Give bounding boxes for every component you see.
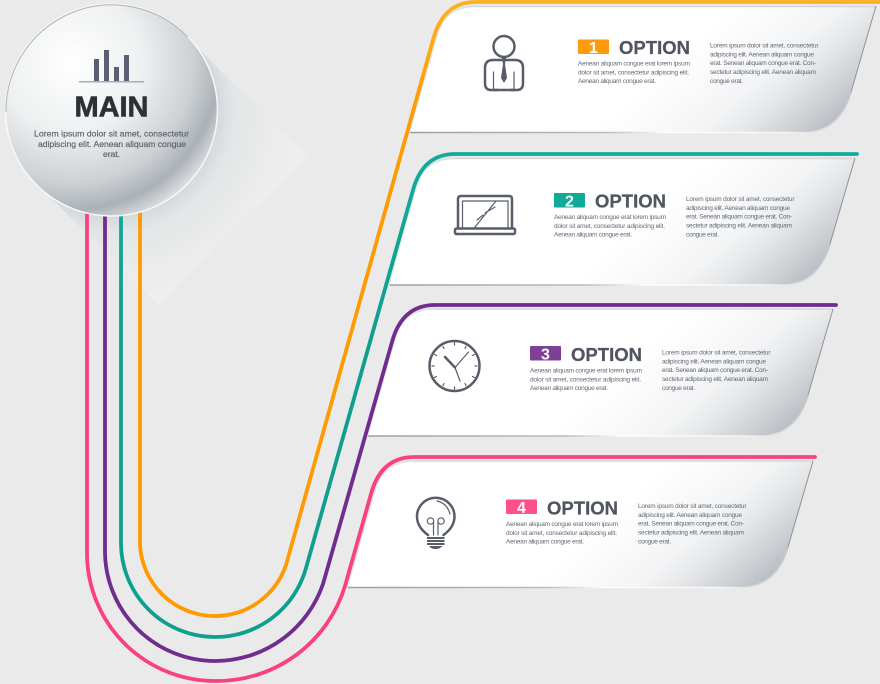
icon: bar chart xyxy=(79,50,144,82)
text: option 1 left column: Aenean aliquam congue erat. xyxy=(578,78,656,85)
text: option 2 right column: adipiscing elit. Aenean aliquam congue xyxy=(686,205,790,212)
icon: light bulb xyxy=(417,498,454,549)
panel 1 shape xyxy=(410,7,876,133)
text: option 3 right column: sectetur adipiscing elit. Aenean aliquam xyxy=(662,376,768,383)
text: option 3 left column: Aenean aliquam congue erat. xyxy=(530,385,608,392)
connector line: teal xyxy=(121,154,857,637)
heading: option 2: OPTION xyxy=(595,190,666,212)
text: option 3 left column xyxy=(530,368,642,392)
icon: businessman xyxy=(485,36,523,90)
text: option 2 left column xyxy=(554,214,666,239)
text: option 2 left column: Aenean aliquam congue erat lorem ipsum xyxy=(554,214,666,221)
text: option 2 left column: Aenean aliquam congue erat. xyxy=(554,232,632,239)
badge 3: 3 xyxy=(541,346,550,363)
heading: option 4: OPTION xyxy=(547,498,618,518)
icon: laptop xyxy=(455,196,515,234)
icon: clock xyxy=(430,341,480,391)
badge 4 xyxy=(506,500,537,517)
heading: option 3: OPTION xyxy=(571,344,642,365)
text: option 1 left column: Aenean aliquam congue erat lorem ipsum xyxy=(578,60,690,68)
text: main description: erat. xyxy=(103,149,120,159)
text: option 2 left column: dolor sit amet, consectetur adipiscing elit. xyxy=(554,223,665,230)
text: option 1 right column xyxy=(710,42,819,85)
text: option 1 right column: sectetur adipiscing elit. Aenean aliquam xyxy=(710,69,816,76)
text: option 4 left column: Aenean aliquam congue erat. xyxy=(506,539,584,546)
circle disc xyxy=(6,4,218,216)
panel: option 4 xyxy=(347,460,813,588)
panel: option 3 xyxy=(367,308,833,436)
panel: option 2 xyxy=(388,158,855,285)
text: option 2 right column: sectetur adipiscing elit. Aenean aliquam xyxy=(686,222,792,230)
badge 1 xyxy=(578,40,609,57)
text: option 4 right column: Lorem ipsum dolor sit amet, consectetur xyxy=(638,503,747,510)
heading: option 1: OPTION xyxy=(619,37,690,58)
text: option 3 right column: congue erat. xyxy=(662,385,695,392)
text: option 1 right column: adipiscing elit. Aenean aliquam congue xyxy=(710,52,814,58)
text: option 3 right column: adipiscing elit. Aenean aliquam congue xyxy=(662,358,766,366)
text: option 4 left column xyxy=(506,521,618,546)
panel 3 shape xyxy=(368,309,833,436)
text: option 3 left column: dolor sit amet, consectetur adipiscing elit. xyxy=(530,376,641,384)
text: option 3 right column xyxy=(662,350,771,392)
connector line: pink xyxy=(87,205,815,681)
text: option 1 left column xyxy=(578,60,690,85)
connector line: purple xyxy=(105,205,836,661)
text: main description: adipiscing elit. Aenean aliquam congue xyxy=(38,139,186,149)
text: option 4 left column: dolor sit amet, consectetur adipiscing elit. xyxy=(506,530,617,537)
text: option 4 right column: sectetur adipiscing elit. Aenean aliquam xyxy=(638,530,744,536)
text: option 1 right column: erat. Senean aliquam congue erat. Con- xyxy=(710,60,816,67)
text: option 4 right column: congue erat. xyxy=(638,538,671,546)
long shadow of main circle xyxy=(45,45,308,305)
badge 3 xyxy=(530,346,561,363)
badge 2: 2 xyxy=(565,193,574,210)
panel 4 shape xyxy=(348,461,813,588)
text: main description xyxy=(34,128,189,159)
text: option 4 right column xyxy=(638,503,747,546)
panel: option 1 xyxy=(409,6,876,133)
text: option 4 right column: erat. Senean aliquam congue erat. Con- xyxy=(638,521,744,528)
text: option 4 left column: Aenean aliquam congue erat lorem ipsum xyxy=(506,521,618,528)
heading: main: MAIN xyxy=(74,92,148,124)
text: option 1 left column: dolor sit amet, consectetur adipiscing elit. xyxy=(578,70,689,76)
text: option 1 right column: congue erat. xyxy=(710,78,743,85)
connector line: orange xyxy=(140,2,880,616)
text: option 4 right column: adipiscing elit. Aenean aliquam congue xyxy=(638,512,742,519)
text: option 2 right column: erat. Senean aliquam congue erat. Con- xyxy=(686,214,792,221)
text: option 2 right column xyxy=(686,196,795,238)
badge 4: 4 xyxy=(517,500,526,517)
text: option 3 left column: Aenean aliquam congue erat lorem ipsum xyxy=(530,368,642,374)
badge 1: 1 xyxy=(589,40,598,57)
text: option 1 right column: Lorem ipsum dolor sit amet, consectetur xyxy=(710,42,819,50)
text: option 3 right column: erat. Senean aliquam congue erat. Con- xyxy=(662,367,768,374)
badge 2 xyxy=(554,193,585,210)
main circle xyxy=(6,4,218,216)
text: option 2 right column: Lorem ipsum dolor sit amet, consectetur xyxy=(686,196,795,203)
text: option 3 right column: Lorem ipsum dolor sit amet, consectetur xyxy=(662,350,771,356)
text: option 2 right column: congue erat. xyxy=(686,232,719,238)
text: main description: Lorem ipsum dolor sit amet, consectetur xyxy=(34,128,189,138)
panel 2 shape xyxy=(390,159,855,285)
